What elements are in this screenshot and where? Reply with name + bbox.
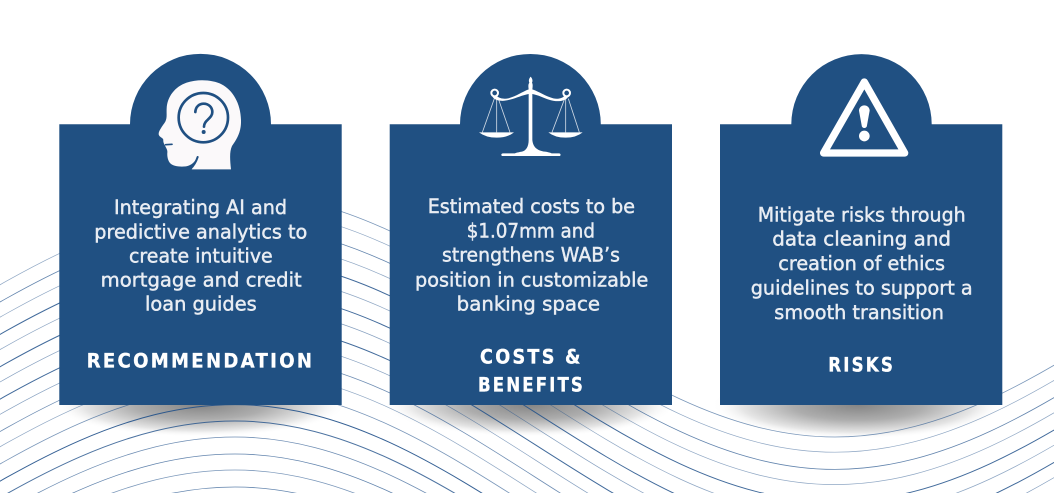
panel: costs and benefits <box>390 54 672 405</box>
body text: Integrating AI and <box>114 196 287 219</box>
icon: head with question mark <box>159 80 241 169</box>
body text: predictive analytics to <box>94 220 307 243</box>
body text: Estimated costs to be <box>428 195 635 218</box>
icon: warning triangle <box>824 82 905 153</box>
card shadows <box>54 371 1004 439</box>
card shape with dome <box>59 54 342 405</box>
heading: RECOMMENDATION <box>87 350 314 373</box>
icon: balance scales <box>479 77 583 156</box>
heading: COSTS & <box>480 345 583 368</box>
body text: strengthens WAB’s <box>442 244 620 266</box>
card shape with dome <box>720 54 1002 405</box>
background wave lines <box>0 193 1054 493</box>
body text: create intuitive <box>129 245 273 268</box>
body text: data cleaning and <box>772 228 951 251</box>
body text: banking space <box>457 293 600 316</box>
body text: guidelines to support a <box>751 276 973 299</box>
heading: RISKS <box>828 354 895 377</box>
body text: position in customizable <box>415 268 648 292</box>
body text: loan guides <box>145 293 257 316</box>
body text: smooth transition <box>774 301 944 324</box>
card shape with dome <box>390 54 672 405</box>
body text: Mitigate risks through <box>758 204 966 227</box>
panel: recommendation <box>59 54 342 405</box>
body text: creation of ethics <box>778 252 945 275</box>
body text: $1.07mm and <box>467 220 595 242</box>
panel: risks <box>720 54 1002 405</box>
body text: mortgage and credit <box>101 269 302 292</box>
heading: BENEFITS <box>478 374 585 397</box>
